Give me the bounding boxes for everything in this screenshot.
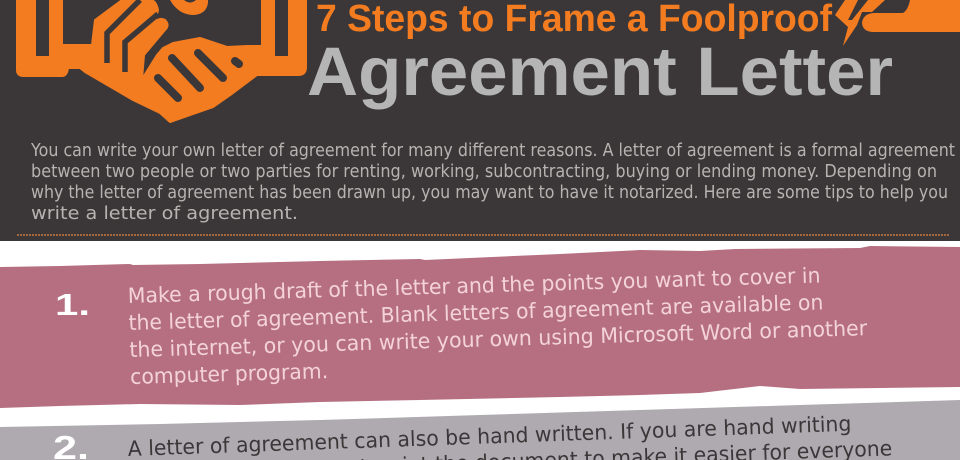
step number 1: 1. [55, 287, 90, 322]
icon: hand with pen [835, 0, 960, 46]
panel: step 1 [0, 246, 960, 408]
panel: step 2 [0, 400, 960, 460]
step 2 text: A letter of agreement can also be hand written. If you are hand writing [127, 412, 852, 460]
panel: dark header [0, 0, 960, 241]
step 1 text: computer program. [130, 359, 328, 389]
heading: Agreement Letter [307, 33, 893, 110]
intro text: write a letter of agreement. [31, 203, 298, 224]
step 1 text [127, 262, 869, 389]
icon: handshake [17, 0, 306, 122]
intro text [30, 140, 955, 224]
step 1 text: Make a rough draft of the letter and the points you want to cover in [127, 263, 821, 308]
step 1 text: the internet, or you can write your own using Microsoft Word or another [129, 316, 868, 362]
step 1 text: the letter of agreement. Blank letters of agreement are available on [128, 290, 824, 335]
